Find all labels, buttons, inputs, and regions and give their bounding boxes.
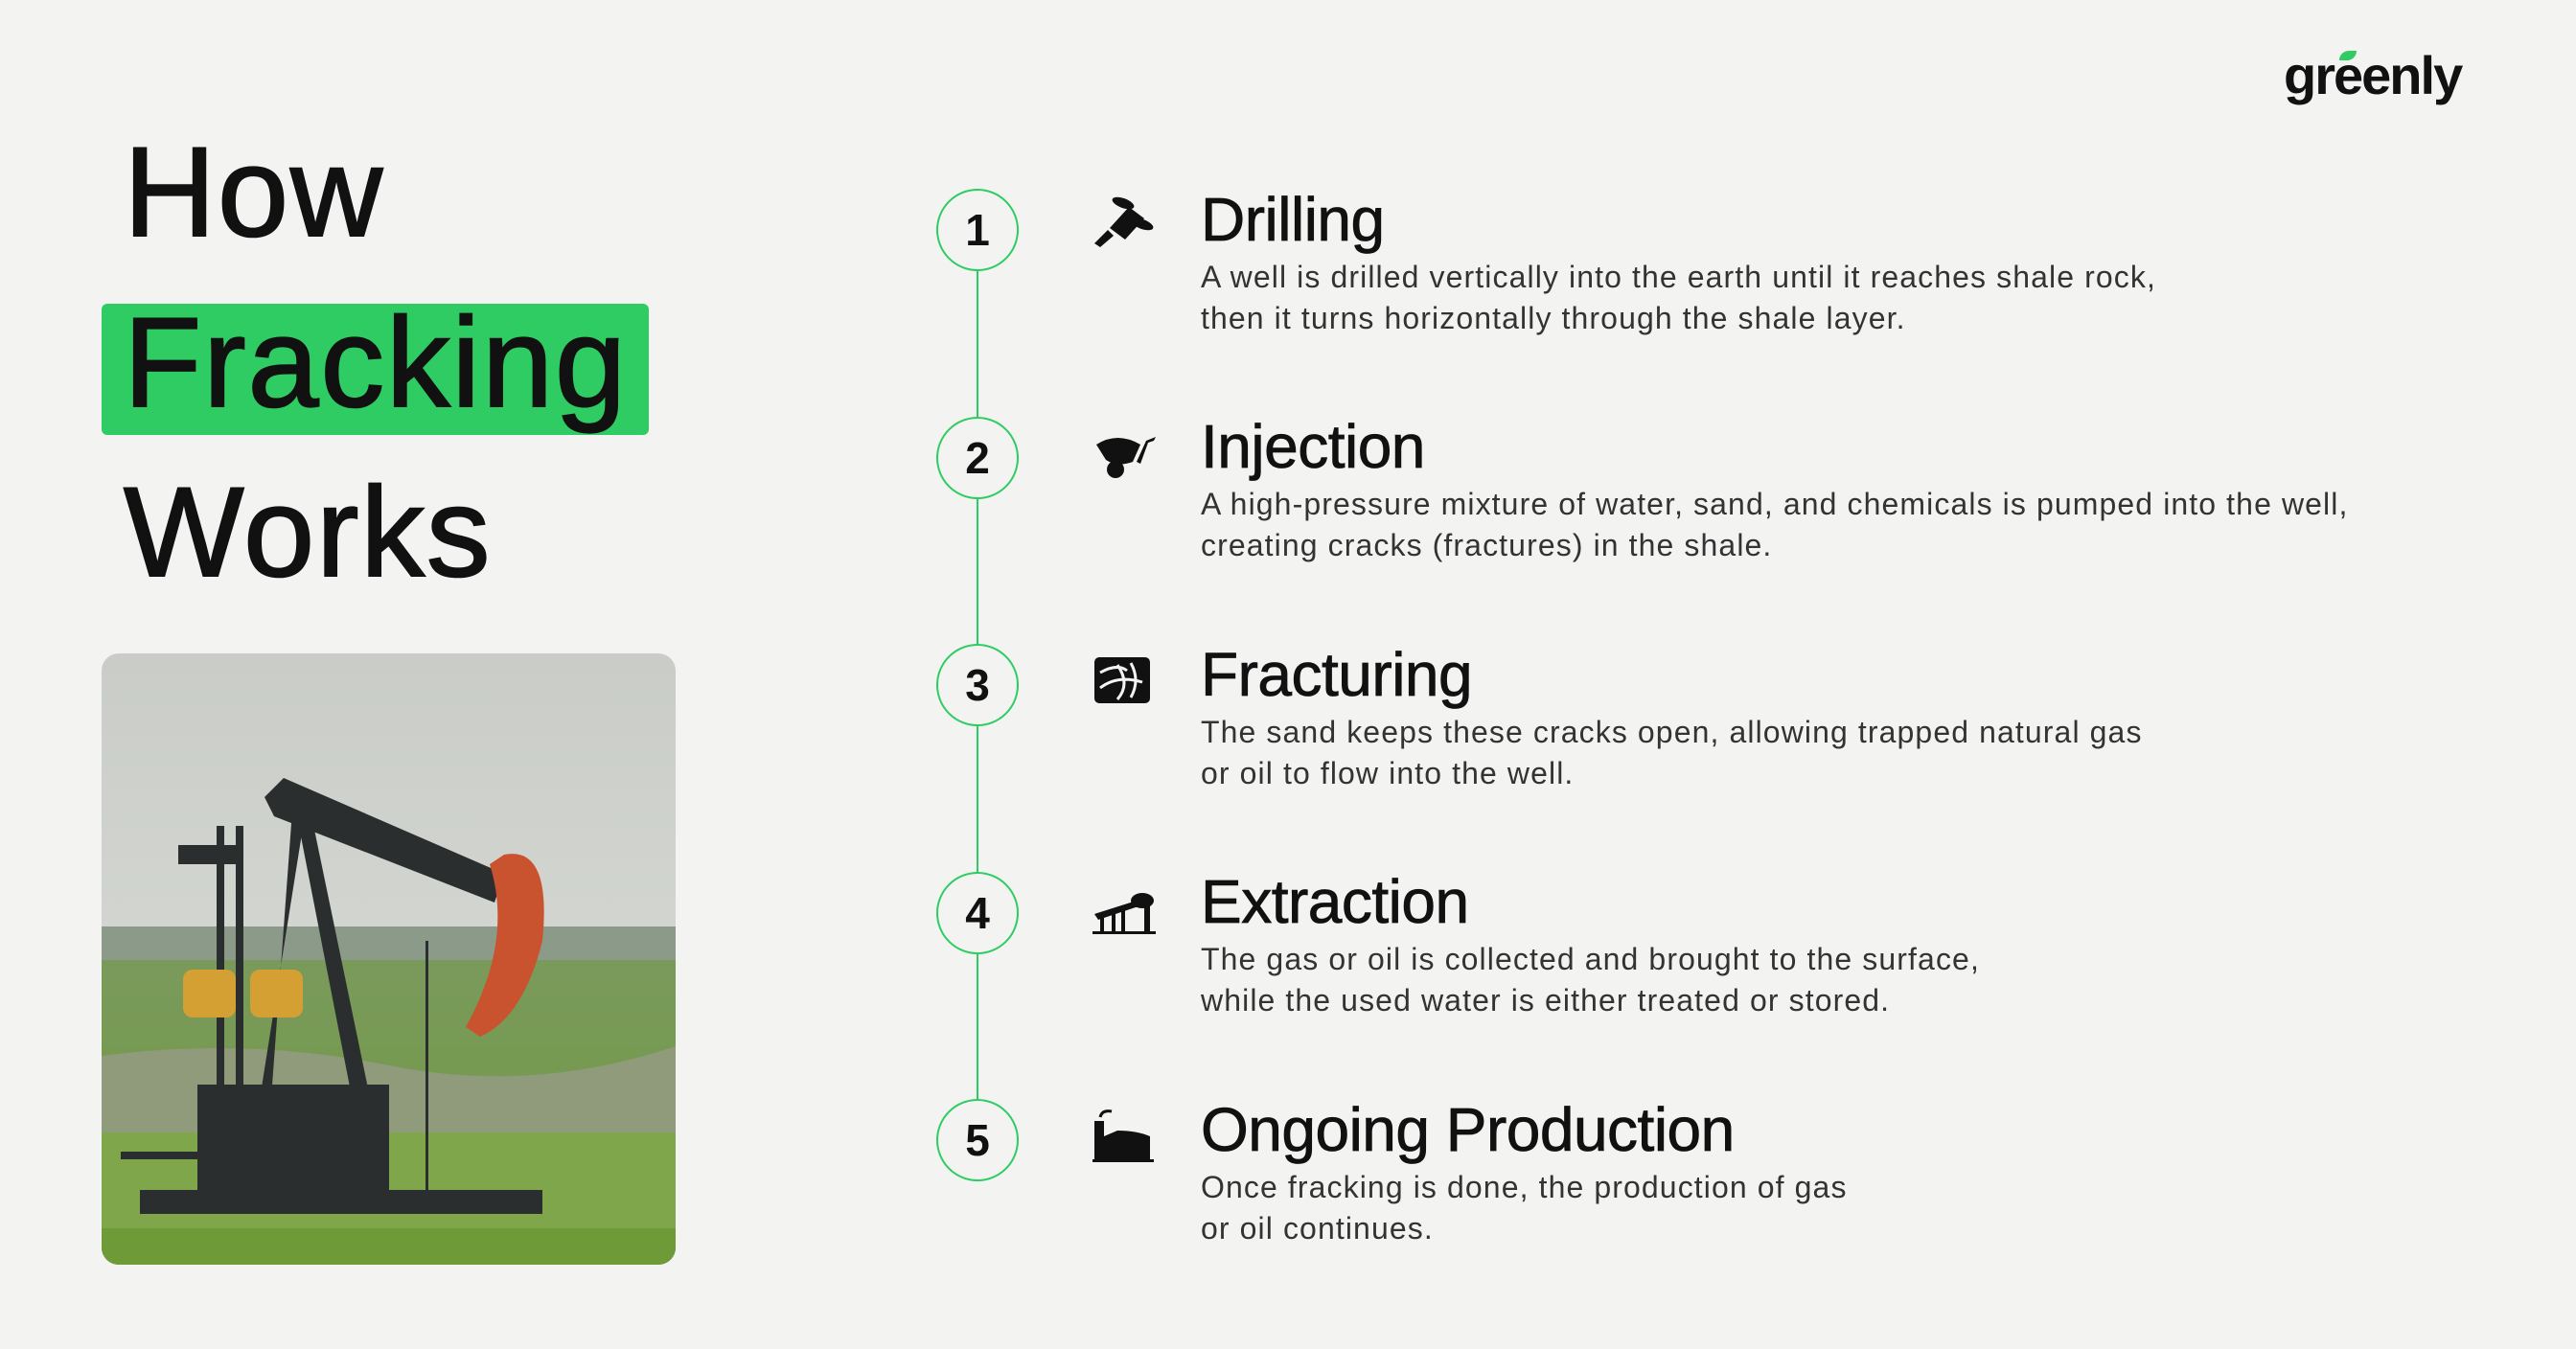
step 1 text (1201, 185, 2156, 335)
step 3 text: The sand keeps these cracks open, allowing trapped natural gas (1201, 715, 2143, 749)
step 1 text: A well is drilled vertically into the earth until it reaches shale rock, (1201, 260, 2156, 294)
step 2 text: Injection (1201, 412, 1425, 481)
step 5 text (1201, 1095, 1848, 1246)
title highlight box (102, 304, 649, 435)
step 2 number: 2 (965, 433, 990, 483)
title: Works: Works (124, 462, 492, 604)
step 5 number (936, 1099, 1019, 1181)
logo: greenly (2284, 45, 2461, 105)
step 5 text: Once fracking is done, the production of gas (1201, 1170, 1848, 1204)
step 2 text: creating cracks (fractures) in the shale. (1201, 528, 1772, 562)
step 5 text: or oil continues. (1201, 1211, 1434, 1246)
step 2 number (936, 417, 1019, 499)
step 3 text (1201, 640, 2143, 790)
step 4 text: The gas or oil is collected and brought to the surface, (1201, 942, 1980, 976)
icon: fracture (1094, 657, 1150, 703)
step 1 text: then it turns horizontally through the shale layer. (1201, 301, 1906, 335)
step 3 text: or oil to flow into the well. (1201, 756, 1574, 790)
step 4 text: Extraction (1201, 867, 1469, 936)
step 4 number: 4 (965, 888, 990, 938)
step 4 text (1201, 867, 1980, 1017)
icon: wheelbarrow (1096, 437, 1156, 478)
step 2 text: A high-pressure mixture of water, sand, and chemicals is pumped into the well, (1201, 487, 2348, 521)
step 1 text: Drilling (1201, 185, 1385, 254)
step 1 number (936, 189, 1019, 271)
step 4 number (936, 872, 1019, 954)
title: How: How (124, 122, 384, 263)
icon: oil pump (1092, 893, 1156, 934)
step 1 number: 1 (965, 205, 990, 255)
step 3 number: 3 (965, 660, 990, 710)
icon: drill (1094, 197, 1154, 247)
timeline line (977, 249, 978, 1111)
step 3 number (936, 644, 1019, 726)
step 2 text (1201, 412, 2348, 562)
title: Fracking: Fracking (124, 292, 628, 434)
step 5 number: 5 (965, 1115, 990, 1165)
icon: factory (1092, 1109, 1154, 1162)
photo: pumpjack (102, 653, 676, 1265)
step 4 text: while the used water is either treated or stored. (1201, 983, 1890, 1017)
step 5 text: Ongoing Production (1201, 1095, 1735, 1164)
step 3 text: Fracturing (1201, 640, 1472, 709)
